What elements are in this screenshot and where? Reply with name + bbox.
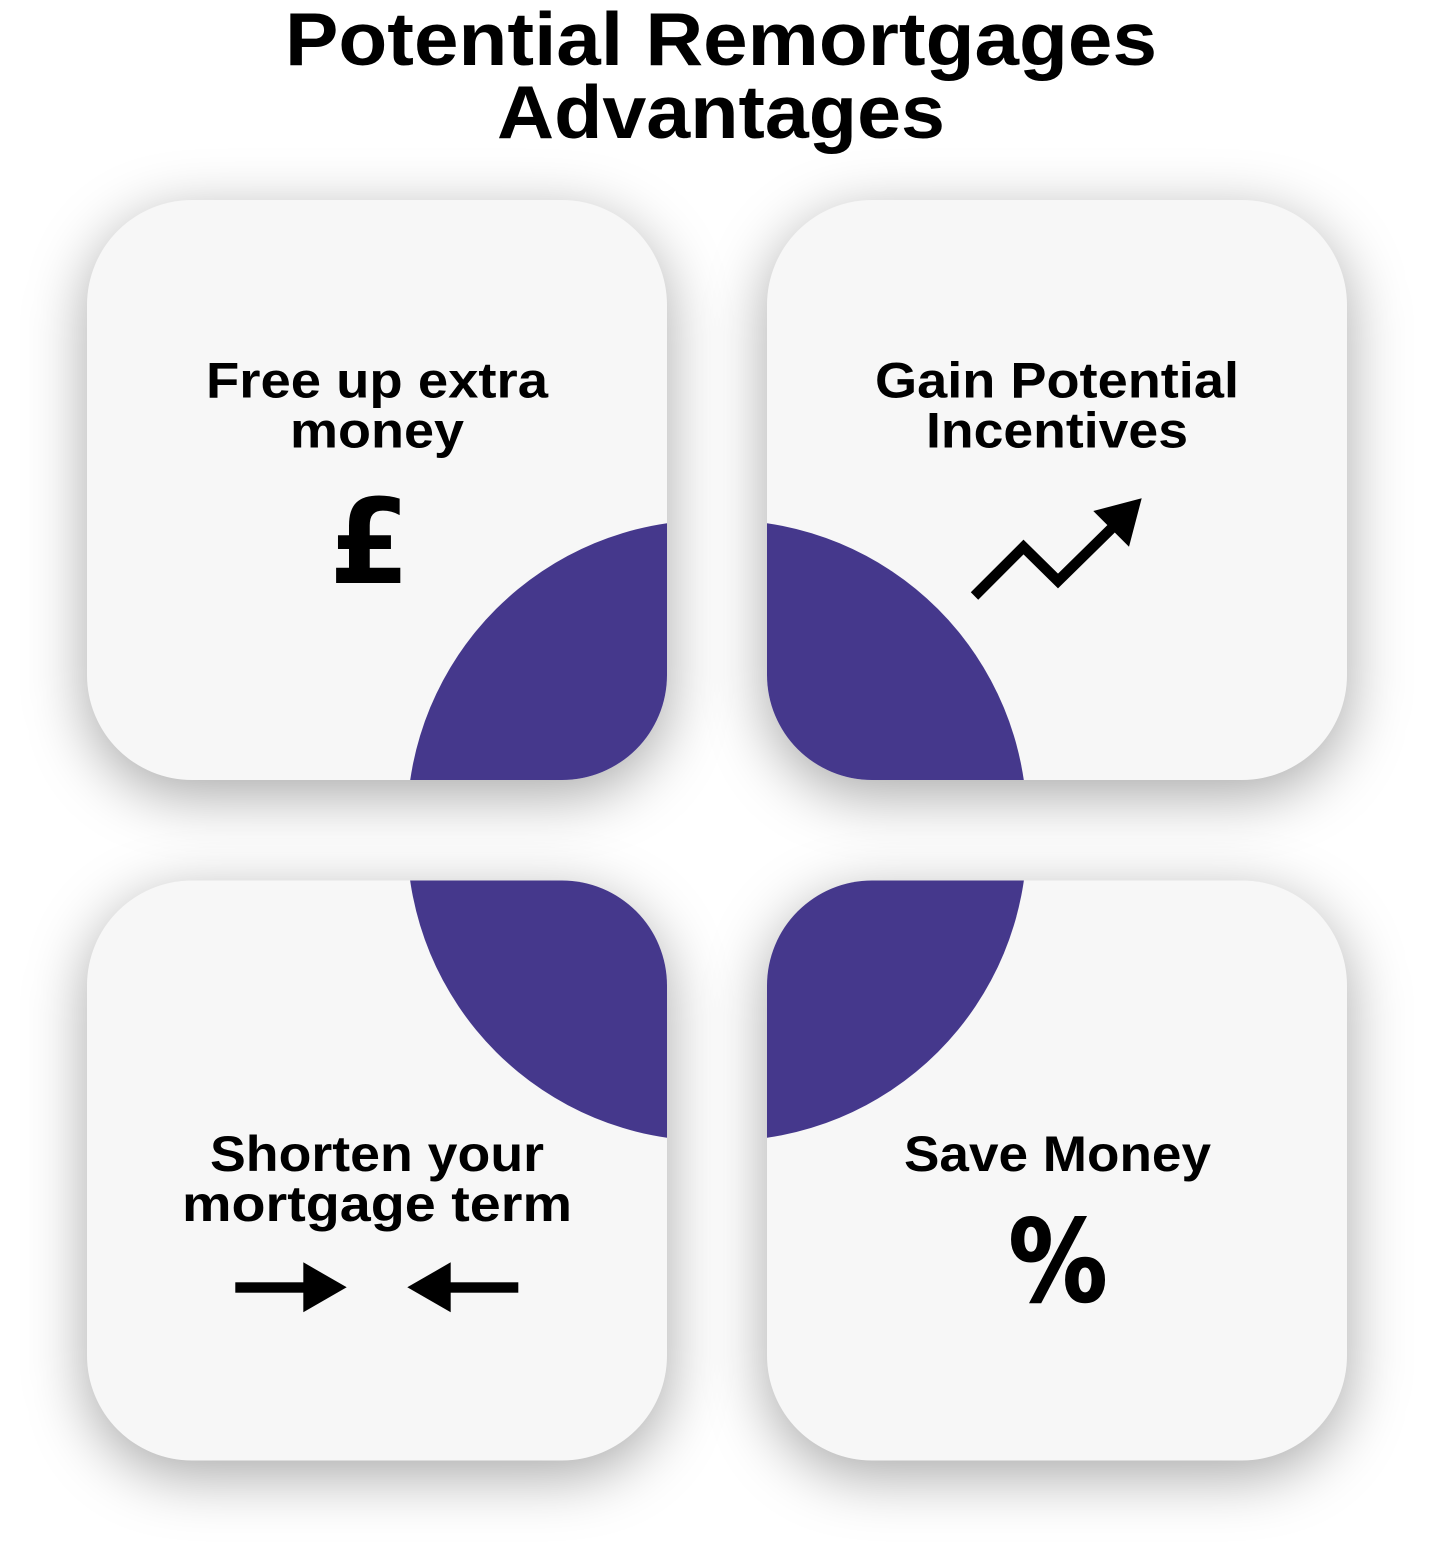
heading: shorten your mortgage term [182,1126,572,1232]
icon: rising trend arrow [974,498,1142,596]
panel: free up extra money [50,178,704,832]
heading: free up extra money: money [290,402,464,458]
heading: shorten your mortgage term: Shorten your [210,1126,544,1182]
quarter circle accent [410,523,667,780]
quarter circle accent [767,880,1024,1138]
heading: gain potential incentives [875,352,1239,458]
quarter circle accent [767,523,1024,780]
title [285,0,1157,154]
title: Advantages [497,70,945,154]
heading: gain potential incentives: Gain Potential [875,352,1239,408]
panel: shorten your mortgage term [50,858,704,1513]
heading: shorten your mortgage term: mortgage term [182,1176,572,1232]
icon: arrows pointing inward [235,1262,518,1312]
icon: percent sign: % [1008,1196,1108,1328]
heading: free up extra money: Free up extra [206,352,549,408]
panel: gain potential incentives [730,178,1384,832]
heading: free up extra money [206,352,549,458]
quarter circle accent [410,880,667,1138]
heading: gain potential incentives: Incentives [926,402,1188,458]
heading: save money: Save Money [904,1126,1211,1182]
panel: save money [730,858,1384,1513]
icon: pound sign: £ [329,473,410,611]
